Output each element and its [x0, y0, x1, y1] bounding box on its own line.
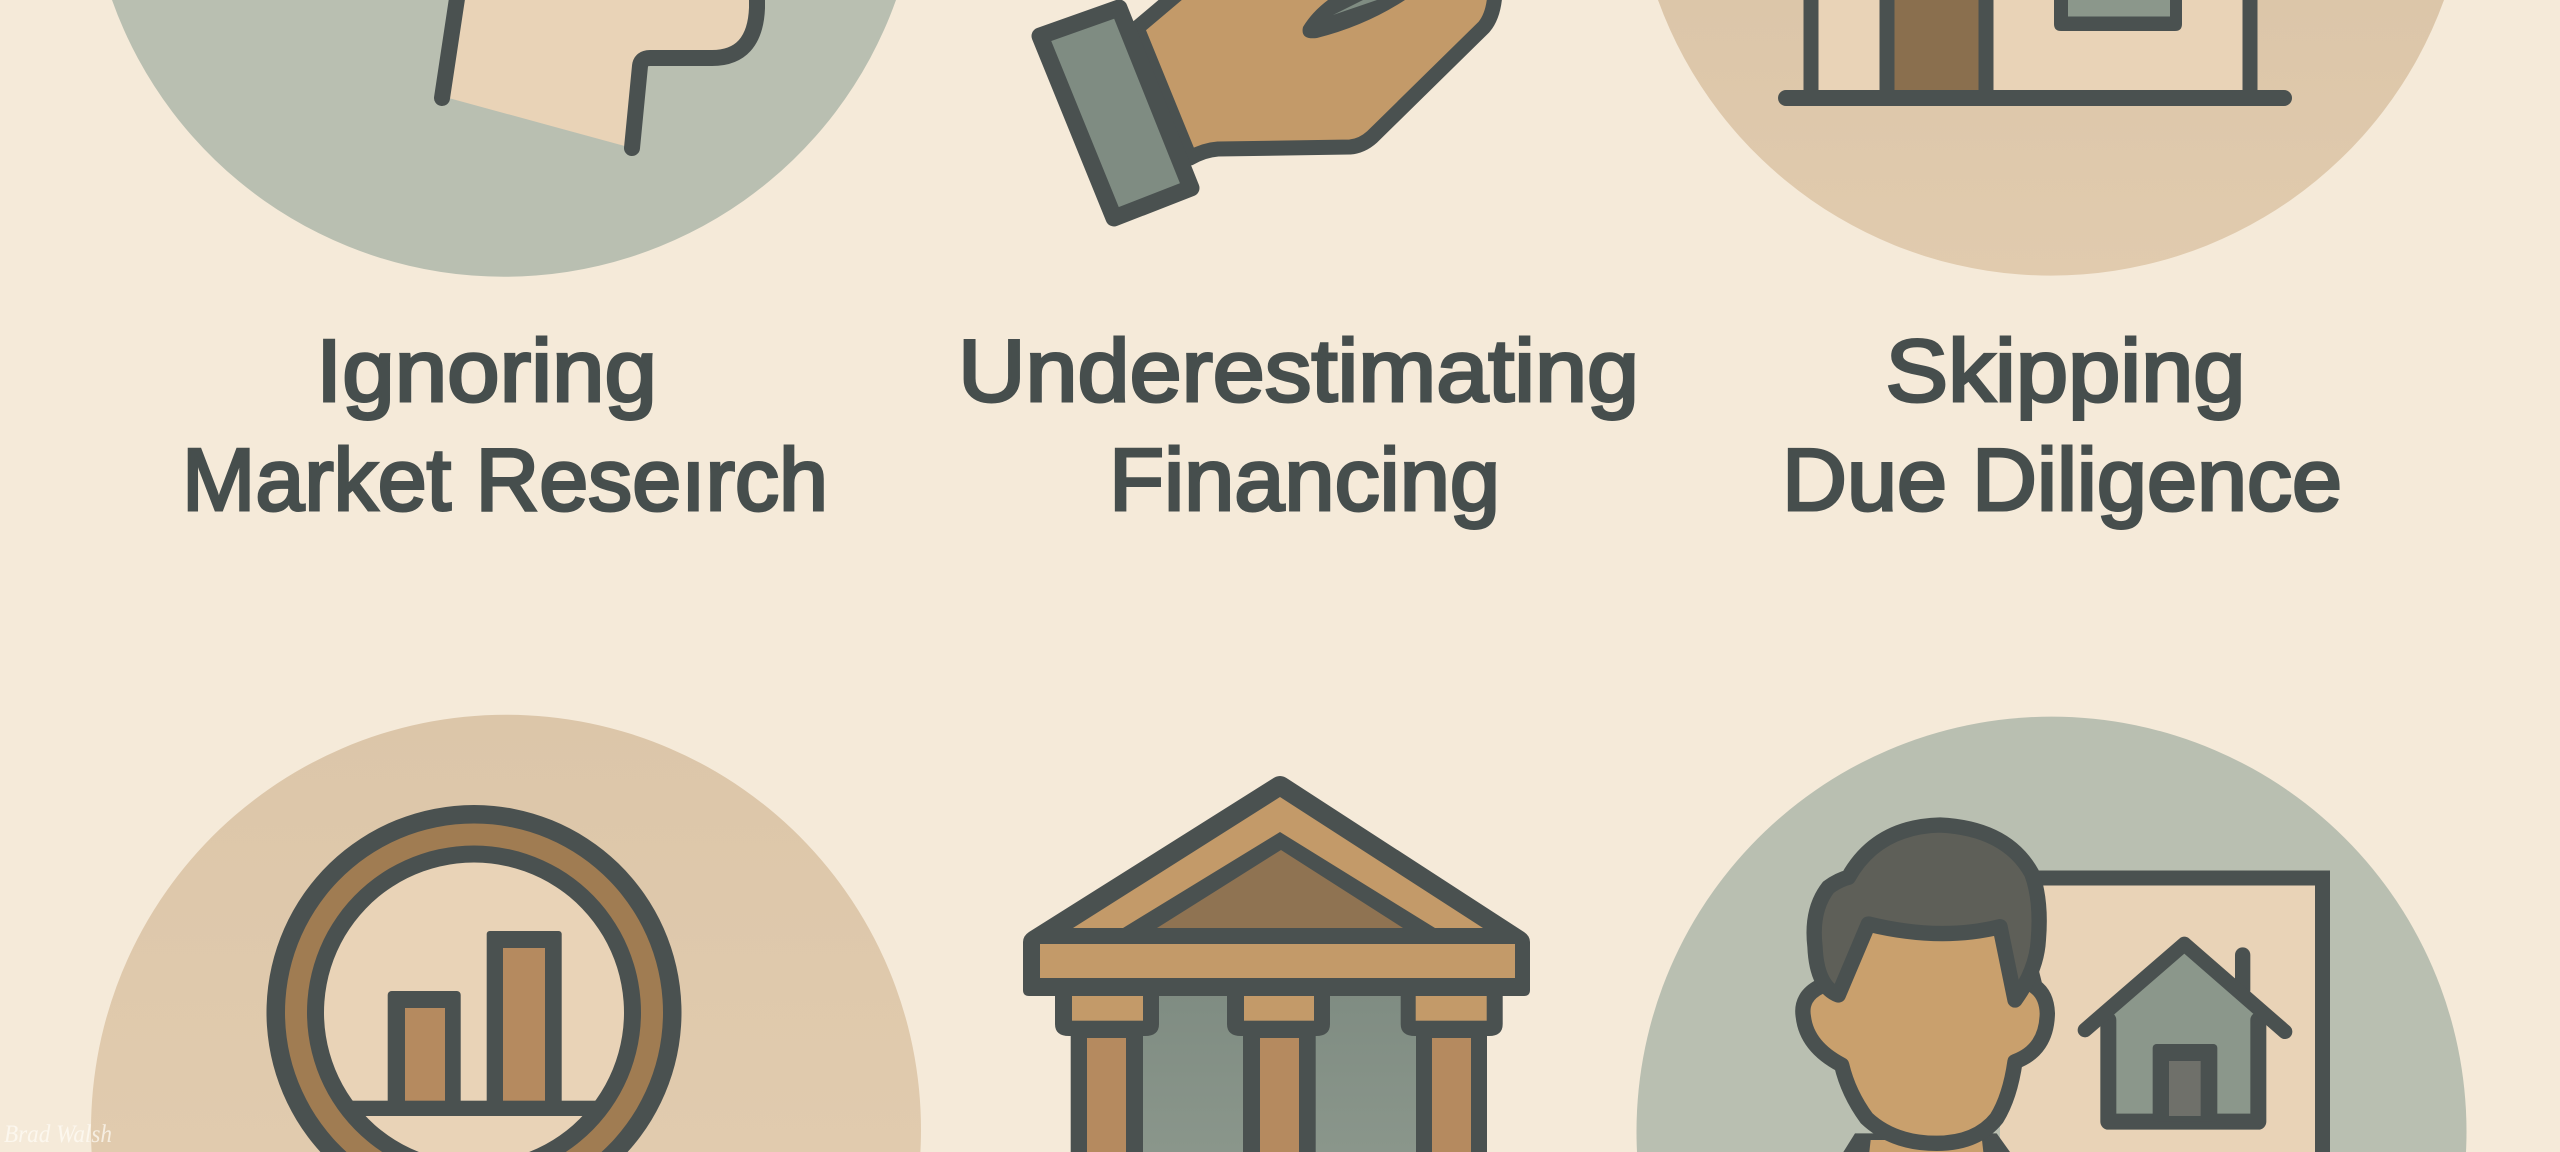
circle background: tan [91, 715, 921, 1152]
circle background: tan [1658, 0, 2444, 276]
icon: person portrait [1803, 825, 2047, 1152]
panel: ignoring market research [112, 0, 896, 529]
panel: bank building [1023, 776, 1530, 1152]
bar: tall [487, 931, 562, 1106]
label: underestimating financing: Financing [1109, 430, 1500, 529]
panel: agent and property [1636, 717, 2466, 1152]
circle background: sage [112, 0, 896, 277]
column: middle [1227, 990, 1330, 1152]
icon: head silhouette [442, 0, 757, 148]
column: right [1401, 990, 1503, 1152]
small house [2085, 944, 2285, 1122]
label: ignoring market research [182, 321, 828, 529]
icon: property board [2000, 878, 2322, 1152]
roof band [1073, 797, 1483, 928]
label: ignoring market research: Ignoring [316, 321, 657, 420]
label: skipping due diligence: Skipping [1886, 321, 2246, 420]
bar: short [388, 991, 461, 1106]
label: underestimating financing [958, 321, 1639, 529]
label: underestimating financing: Underestimating [958, 321, 1639, 420]
icon: bank with columns [1023, 776, 1530, 1152]
circle background: sage [1636, 717, 2466, 1152]
tympanum [1157, 850, 1403, 928]
panel: skipping due diligence [1658, 0, 2444, 529]
label: skipping due diligence: Due Diligence [1782, 430, 2342, 529]
column: left [1055, 990, 1159, 1152]
label: skipping due diligence [1782, 321, 2342, 529]
icon: house facade [1786, 0, 2284, 98]
icon: magnifying glass with bar chart [266, 805, 681, 1152]
panel: underestimating financing [958, 0, 1639, 529]
signature: Brad Walsh [4, 1121, 112, 1148]
panel: market analysis magnifier [91, 715, 921, 1152]
icon: hand holding pen [1040, 0, 1495, 218]
label: ignoring market research: Market Reseırch [182, 430, 828, 529]
entablature [1040, 944, 1515, 978]
